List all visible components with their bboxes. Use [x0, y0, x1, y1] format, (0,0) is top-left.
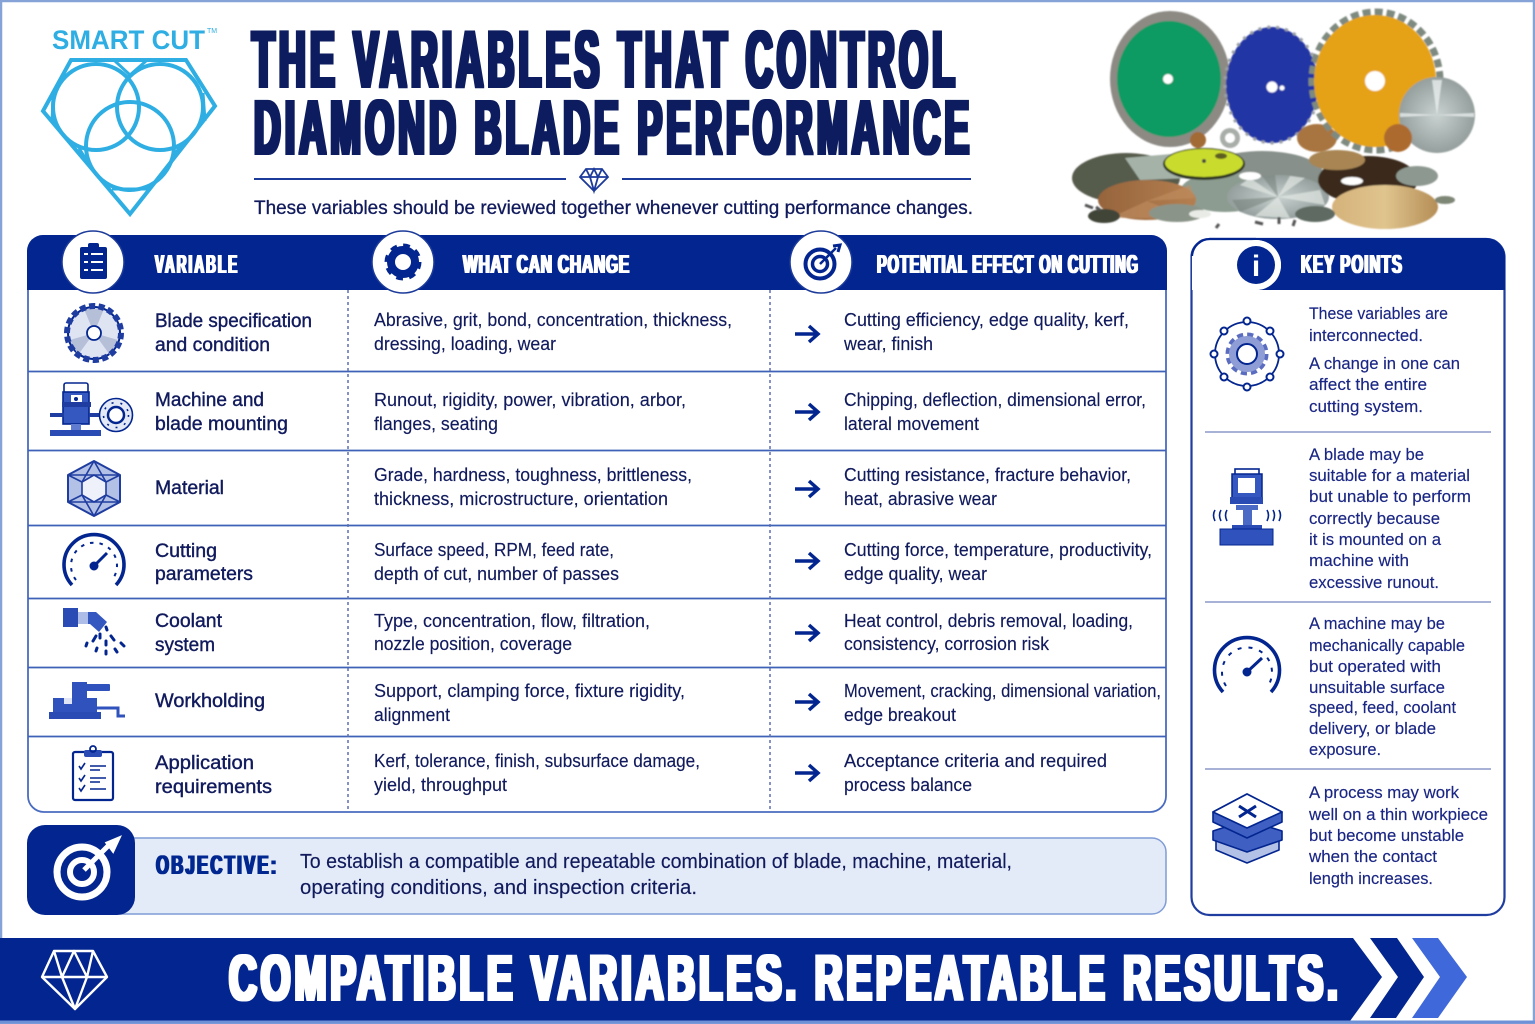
text: unsuitable surface: [1309, 678, 1445, 697]
variable name: parameters: [155, 563, 253, 585]
trademark mark: TM: [207, 28, 217, 35]
text: exposure.: [1309, 740, 1381, 759]
text: These variables are: [1309, 304, 1448, 323]
green blade: [1110, 11, 1230, 147]
variable name: requirements: [155, 776, 272, 798]
variable name: Cutting: [155, 540, 217, 562]
potential effect: Movement, cracking, dimensional variation,: [844, 680, 1161, 701]
what can change: dressing, loading, wear: [374, 333, 556, 354]
header text: POTENTIAL EFFECT ON CUTTING: [877, 251, 1138, 279]
icon: checklist clipboard: [73, 746, 113, 800]
icon: target: [806, 245, 840, 278]
silver blade: [1399, 77, 1475, 153]
key point 4: [1213, 783, 1488, 888]
text: delivery, or blade: [1309, 719, 1436, 738]
title divider with diamond: [254, 169, 971, 191]
potential effect: heat, abrasive wear: [844, 488, 997, 509]
text: speed, feed, coolant: [1309, 698, 1456, 717]
row: coolant system: [63, 608, 1133, 656]
row dividers and column dividers: [28, 290, 1166, 812]
yellow blade: [1163, 148, 1245, 180]
icon: faceted hexagonal material: [68, 461, 120, 516]
variable name: system: [155, 634, 215, 656]
header text: WHAT CAN CHANGE: [463, 250, 629, 279]
copper small disc: [1384, 124, 1412, 152]
potential effect: edge breakout: [844, 704, 956, 725]
objective label: OBJECTIVE:: [156, 850, 276, 880]
objective text: To establish a compatible and repeatable combination of blade, machine, material,: [300, 851, 1012, 873]
objective background: [100, 838, 1166, 914]
text: A process may work: [1309, 783, 1460, 802]
arrow: [795, 553, 818, 569]
icon: vise clamp: [49, 682, 125, 719]
arrow: [795, 625, 818, 641]
panel: key points: [1192, 238, 1505, 915]
icon: stacked workpieces: [1213, 794, 1282, 863]
image: assortment of diamond blades: [1072, 11, 1475, 229]
arrow: [795, 481, 818, 497]
logo: Smart Cut: [43, 25, 217, 214]
heading: KEY POINTS: [1301, 250, 1402, 279]
row: application requirements: [73, 746, 1107, 800]
text: it is mounted on a: [1309, 530, 1442, 549]
row: cutting parameters: [64, 535, 1152, 585]
arrow: [795, 404, 818, 420]
potential effect: edge quality, wear: [844, 563, 987, 584]
what can change: Grade, hardness, toughness, brittleness,: [374, 464, 692, 485]
what can change: Type, concentration, flow, filtration,: [374, 610, 650, 631]
icon: info: i: [1252, 250, 1260, 283]
row: workholding: [49, 680, 1161, 725]
what can change: alignment: [374, 704, 450, 725]
text: but operated with: [1309, 657, 1441, 676]
variable name: Coolant: [155, 610, 223, 632]
table: variables: [27, 231, 1167, 812]
logo diamond with three circles: [43, 60, 215, 214]
icon: machine spindle and flange: [50, 383, 132, 436]
objective icon tile: [27, 825, 135, 915]
bottom banner: [0, 938, 1535, 1022]
icon: coolant nozzle and spray: [63, 608, 124, 654]
subtitle: These variables should be reviewed together whenever cutting performance changes.: [254, 198, 973, 219]
banner bar: [0, 938, 1382, 1021]
text: A blade may be: [1309, 445, 1424, 464]
icon: vibrating machine: [1214, 469, 1280, 545]
icon: speed gauge: [1215, 638, 1280, 692]
potential effect: consistency, corrosion risk: [844, 633, 1050, 654]
arrow: [795, 694, 818, 710]
row: blade specification: [67, 306, 1129, 360]
text: well on a thin workpiece: [1308, 805, 1488, 824]
text: A machine may be: [1309, 614, 1445, 633]
arrow: [795, 326, 818, 342]
logo wordmark: SMART CUT: [52, 25, 205, 55]
what can change: Runout, rigidity, power, vibration, arbor,: [374, 389, 686, 410]
variable name: Blade specification: [155, 310, 312, 332]
text: suitable for a material: [1309, 466, 1470, 485]
column header: Potential effect: [790, 231, 1138, 293]
icon: clipboard: [80, 243, 107, 279]
variable name: Material: [155, 477, 224, 499]
text: but become unstable: [1309, 826, 1464, 845]
what can change: Abrasive, grit, bond, concentration, thickness,: [374, 309, 732, 330]
what can change: nozzle position, coverage: [374, 633, 572, 654]
text: interconnected.: [1309, 326, 1423, 345]
blue segmented blade: [1225, 27, 1319, 143]
column header: What can change: [372, 231, 629, 293]
table frame: [28, 236, 1166, 812]
variable name: Application: [155, 752, 254, 774]
icon: target with arrow: [57, 838, 119, 897]
variable name: blade mounting: [155, 413, 288, 435]
variable name: Machine and: [155, 389, 264, 411]
potential effect: Cutting efficiency, edge quality, kerf,: [844, 309, 1129, 330]
what can change: yield, throughput: [374, 774, 507, 795]
chevron light: [1412, 938, 1467, 1018]
text: machine with: [1309, 551, 1409, 570]
potential effect: Heat control, debris removal, loading,: [844, 610, 1133, 631]
chevron dark: [1370, 938, 1424, 1018]
panel: objective: [27, 825, 1166, 915]
icon: diamond outline: [42, 951, 107, 1009]
banner slogan: COMPATIBLE VARIABLES. REPEATABLE RESULTS.: [229, 943, 1338, 1015]
icon: gear: [387, 246, 419, 278]
potential effect: process balance: [844, 774, 972, 795]
icon: interconnected gear: [1210, 318, 1284, 390]
text: excessive runout.: [1309, 573, 1439, 592]
key point 2: [1214, 445, 1471, 592]
key point 3: [1215, 614, 1465, 759]
icon: info: [1237, 246, 1275, 284]
potential effect: Chipping, deflection, dimensional error,: [844, 389, 1146, 410]
what can change: depth of cut, number of passes: [374, 563, 619, 584]
potential effect: Cutting resistance, fracture behavior,: [844, 464, 1131, 485]
text: correctly because: [1309, 509, 1440, 528]
what can change: Support, clamping force, fixture rigidity,: [374, 680, 685, 701]
potential effect: Cutting force, temperature, productivity,: [844, 539, 1152, 560]
copper disc behind orange: [1297, 124, 1337, 152]
icon: speed gauge: [64, 535, 124, 585]
title line 1: THE VARIABLES THAT CONTROL: [252, 15, 955, 105]
column header: Variable: [62, 231, 237, 293]
what can change: Kerf, tolerance, finish, subsurface damage,: [374, 750, 700, 771]
row: material: [68, 461, 1131, 516]
lower blade pile: [1072, 148, 1455, 229]
key point 1: [1210, 304, 1460, 416]
key points frame: [1192, 239, 1504, 915]
arrow: [795, 765, 818, 781]
text: A change in one can: [1309, 354, 1460, 373]
potential effect: wear, finish: [843, 333, 933, 354]
text: affect the entire: [1309, 375, 1427, 394]
variable name: and condition: [155, 334, 270, 356]
potential effect: lateral movement: [844, 413, 979, 434]
text: cutting system.: [1309, 397, 1423, 416]
header text: VARIABLE: [155, 250, 237, 279]
objective text: operating conditions, and inspection criteria.: [300, 877, 697, 899]
text: when the contact: [1308, 847, 1437, 866]
title line 2: DIAMOND BLADE PERFORMANCE: [254, 84, 969, 171]
what can change: Surface speed, RPM, feed rate,: [374, 539, 614, 560]
icon: small diamond: [580, 169, 608, 191]
orange segmented blade: [1312, 12, 1440, 150]
table header bar: [27, 235, 1167, 290]
title: [252, 15, 969, 171]
row: machine and blade mounting: [50, 383, 1146, 436]
key points header: [1192, 238, 1505, 290]
what can change: thickness, microstructure, orientation: [374, 488, 668, 509]
icon: blade: [67, 306, 121, 360]
text: mechanically capable: [1309, 636, 1465, 655]
variable name: Workholding: [155, 690, 265, 712]
text: but unable to perform: [1309, 487, 1471, 506]
potential effect: Acceptance criteria and required: [844, 750, 1107, 771]
small discs: [1190, 128, 1240, 148]
text: length increases.: [1309, 869, 1433, 888]
what can change: flanges, seating: [374, 413, 498, 434]
